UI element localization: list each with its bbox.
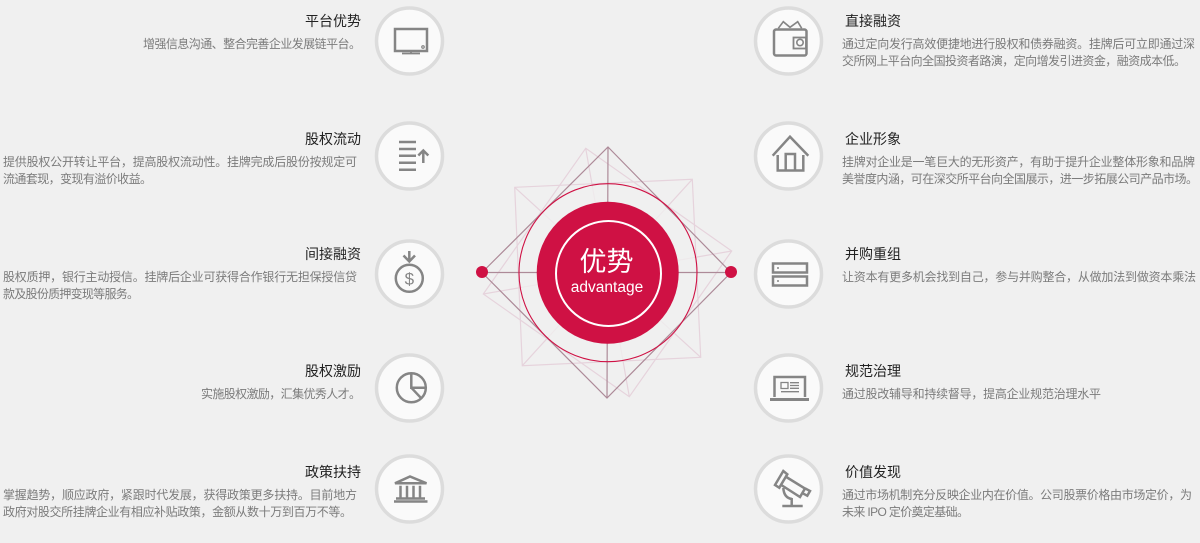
description: 美誉度内涵，可在深交所平台向全国展示，进一步拓展公司产品市场。 bbox=[842, 171, 1198, 186]
description bbox=[3, 269, 357, 301]
icon: wallet bbox=[774, 22, 806, 56]
panel: 股权流动 bbox=[3, 123, 442, 189]
outer ring bbox=[519, 184, 697, 362]
light rotated square bbox=[483, 148, 732, 397]
description: 股权质押，银行主动授信。挂牌后企业可获得合作银行无担保授信贷 bbox=[3, 269, 357, 284]
description bbox=[3, 154, 357, 186]
center subtitle: advantage bbox=[571, 279, 643, 296]
main diamond bbox=[482, 147, 731, 398]
heading: 政策扶持 bbox=[305, 464, 361, 480]
panel: 并购重组 bbox=[756, 241, 1196, 307]
right dot bbox=[725, 266, 737, 278]
description bbox=[3, 487, 357, 519]
panel: 间接融资 bbox=[3, 241, 442, 307]
heading: 股权流动 bbox=[305, 131, 361, 147]
icon: list with arrow bbox=[399, 142, 428, 170]
description: 让资本有更多机会找到自己，参与并购整合，从做加法到做资本乘法 bbox=[842, 269, 1196, 284]
description: 掌握趋势，顺应政府，紧跟时代发展，获得政策更多扶持。目前地方 bbox=[3, 487, 357, 502]
icon: money bag bbox=[396, 251, 423, 292]
description bbox=[842, 154, 1198, 186]
panel: 股权激励 bbox=[201, 355, 442, 421]
panel: 平台优势 bbox=[143, 8, 442, 74]
icon: house bbox=[773, 137, 808, 170]
center title: 优势 bbox=[580, 247, 634, 277]
heading: 平台优势 bbox=[305, 13, 361, 29]
heading: 企业形象 bbox=[845, 131, 901, 147]
description: 通过市场机制充分反映企业内在价值。公司股票价格由市场定价，为 bbox=[842, 487, 1192, 502]
description: 挂牌对企业是一笔巨大的无形资产，有助于提升企业整体形象和品牌 bbox=[842, 154, 1195, 169]
panel: 直接融资 bbox=[756, 8, 1195, 74]
description: 流通套现，变现有溢价收益。 bbox=[3, 171, 152, 186]
panel: 企业形象 bbox=[756, 123, 1198, 189]
description: 款及股份质押变现等服务。 bbox=[3, 286, 139, 301]
heading: 股权激励 bbox=[305, 363, 361, 379]
description bbox=[842, 487, 1192, 519]
panel: 价值发现 bbox=[756, 456, 1192, 522]
panel: 规范治理 bbox=[756, 355, 1101, 421]
description: 提供股权公开转让平台，提高股权流动性。挂牌完成后股份按规定可 bbox=[3, 154, 357, 169]
heading: 并购重组 bbox=[845, 246, 901, 262]
icon: pie chart bbox=[397, 373, 426, 402]
center diagram bbox=[476, 147, 737, 398]
heading: 直接融资 bbox=[845, 13, 901, 29]
icon: telescope bbox=[775, 471, 810, 506]
description: 增强信息沟通、整合完善企业发展链平台。 bbox=[143, 36, 361, 51]
description bbox=[842, 36, 1195, 68]
icon: laptop bbox=[770, 377, 809, 400]
red disc bbox=[537, 202, 679, 344]
left dot bbox=[476, 266, 488, 278]
ring backing bbox=[520, 185, 696, 361]
icon: server bbox=[773, 264, 807, 286]
description: 交所网上平台向全国投资者路演，定向增发引进资金，融资成本低。 bbox=[842, 53, 1186, 68]
icon: money bag: $ bbox=[405, 270, 415, 288]
heading: 价值发现 bbox=[845, 464, 901, 480]
description: 通过股改辅导和持续督导，提高企业规范治理水平 bbox=[842, 386, 1101, 401]
panel: 政策扶持 bbox=[3, 456, 442, 522]
icon: bank bbox=[394, 476, 428, 502]
icon: monitor bbox=[395, 29, 427, 54]
description: 未来 IPO 定价奠定基础。 bbox=[842, 504, 969, 519]
heading: 间接融资 bbox=[305, 246, 361, 262]
description: 通过定向发行高效便捷地进行股权和债券融资。挂牌后可立即通过深 bbox=[842, 36, 1195, 51]
description: 实施股权激励，汇集优秀人才。 bbox=[201, 386, 361, 401]
description: 政府对股交所挂牌企业有相应补贴政策，金额从数十万到百万不等。 bbox=[3, 504, 352, 519]
heading: 规范治理 bbox=[845, 363, 901, 379]
